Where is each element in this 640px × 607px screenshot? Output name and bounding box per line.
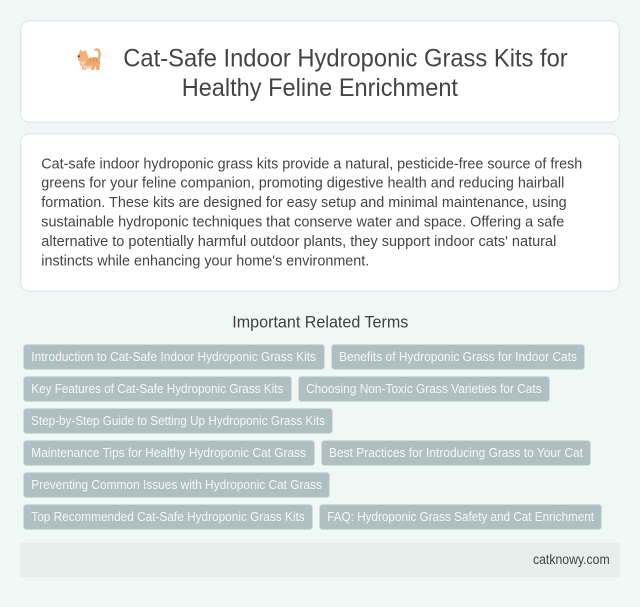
tag: maintenance tips [24, 440, 314, 466]
tag: preventing issues: Preventing Common Issues with Hydroponic Cat Grass [31, 477, 322, 492]
text block: description: greens for your feline companion, promoting digestive health and reducing hairball [41, 175, 564, 192]
tag: non-toxic varieties: Choosing Non-Toxic Grass Varieties for Cats [306, 381, 542, 396]
tag: maintenance tips: Maintenance Tips for Healthy Hydroponic Cat Grass [31, 445, 306, 460]
tag: introduction: Introduction to Cat-Safe Indoor Hydroponic Grass Kits [31, 349, 316, 364]
tag: best practices: Best Practices for Introducing Grass to Your Cat [329, 445, 583, 460]
tag: key features: Key Features of Cat-Safe Hydroponic Grass Kits [31, 381, 284, 396]
text block: description: Cat-safe indoor hydroponic grass kits provide a natural, pesticide-free source of fresh [41, 155, 582, 172]
panel: title card [21, 21, 619, 122]
title: Cat-Safe Indoor Hydroponic Grass Kits for [123, 44, 568, 72]
tag: step-by-step guide [24, 408, 332, 434]
tag: faq [320, 504, 602, 530]
icon: orange cat [77, 48, 101, 70]
tag: key features [24, 376, 292, 402]
text block: description: sustainable hydroponic techniques that conserve water and space. Offering a safe [41, 214, 564, 231]
tag: non-toxic varieties [298, 376, 550, 402]
tag: introduction [24, 344, 324, 370]
tag: benefits: Benefits of Hydroponic Grass for Indoor Cats [339, 349, 577, 364]
text block: description: alternative to potentially harmful outdoor plants, they support indoor cats' natural [41, 233, 556, 250]
tag: preventing issues [24, 472, 330, 498]
tag list: related terms [24, 344, 602, 530]
tag: benefits [332, 344, 584, 370]
title: Healthy Feline Enrichment [182, 74, 458, 102]
tag: faq: FAQ: Hydroponic Grass Safety and Cat Enrichment [327, 509, 594, 524]
panel: description [21, 134, 619, 291]
tag: top recommended: Top Recommended Cat-Safe Hydroponic Grass Kits [31, 509, 305, 524]
tag: top recommended [24, 504, 312, 530]
text block: description [41, 155, 582, 269]
title [123, 44, 568, 102]
text block: description: formation. These kits are designed for easy setup and minimal maintenance, using [41, 194, 567, 211]
text block: description: instincts while enhancing your home's environment. [41, 252, 369, 269]
footer: catknowy.com [533, 552, 610, 567]
tag: best practices [322, 440, 590, 466]
tag: step-by-step guide: Step-by-Step Guide to Setting Up Hydroponic Grass Kits [31, 413, 325, 428]
footer [20, 543, 620, 577]
heading: related terms: Important Related Terms [232, 313, 408, 331]
